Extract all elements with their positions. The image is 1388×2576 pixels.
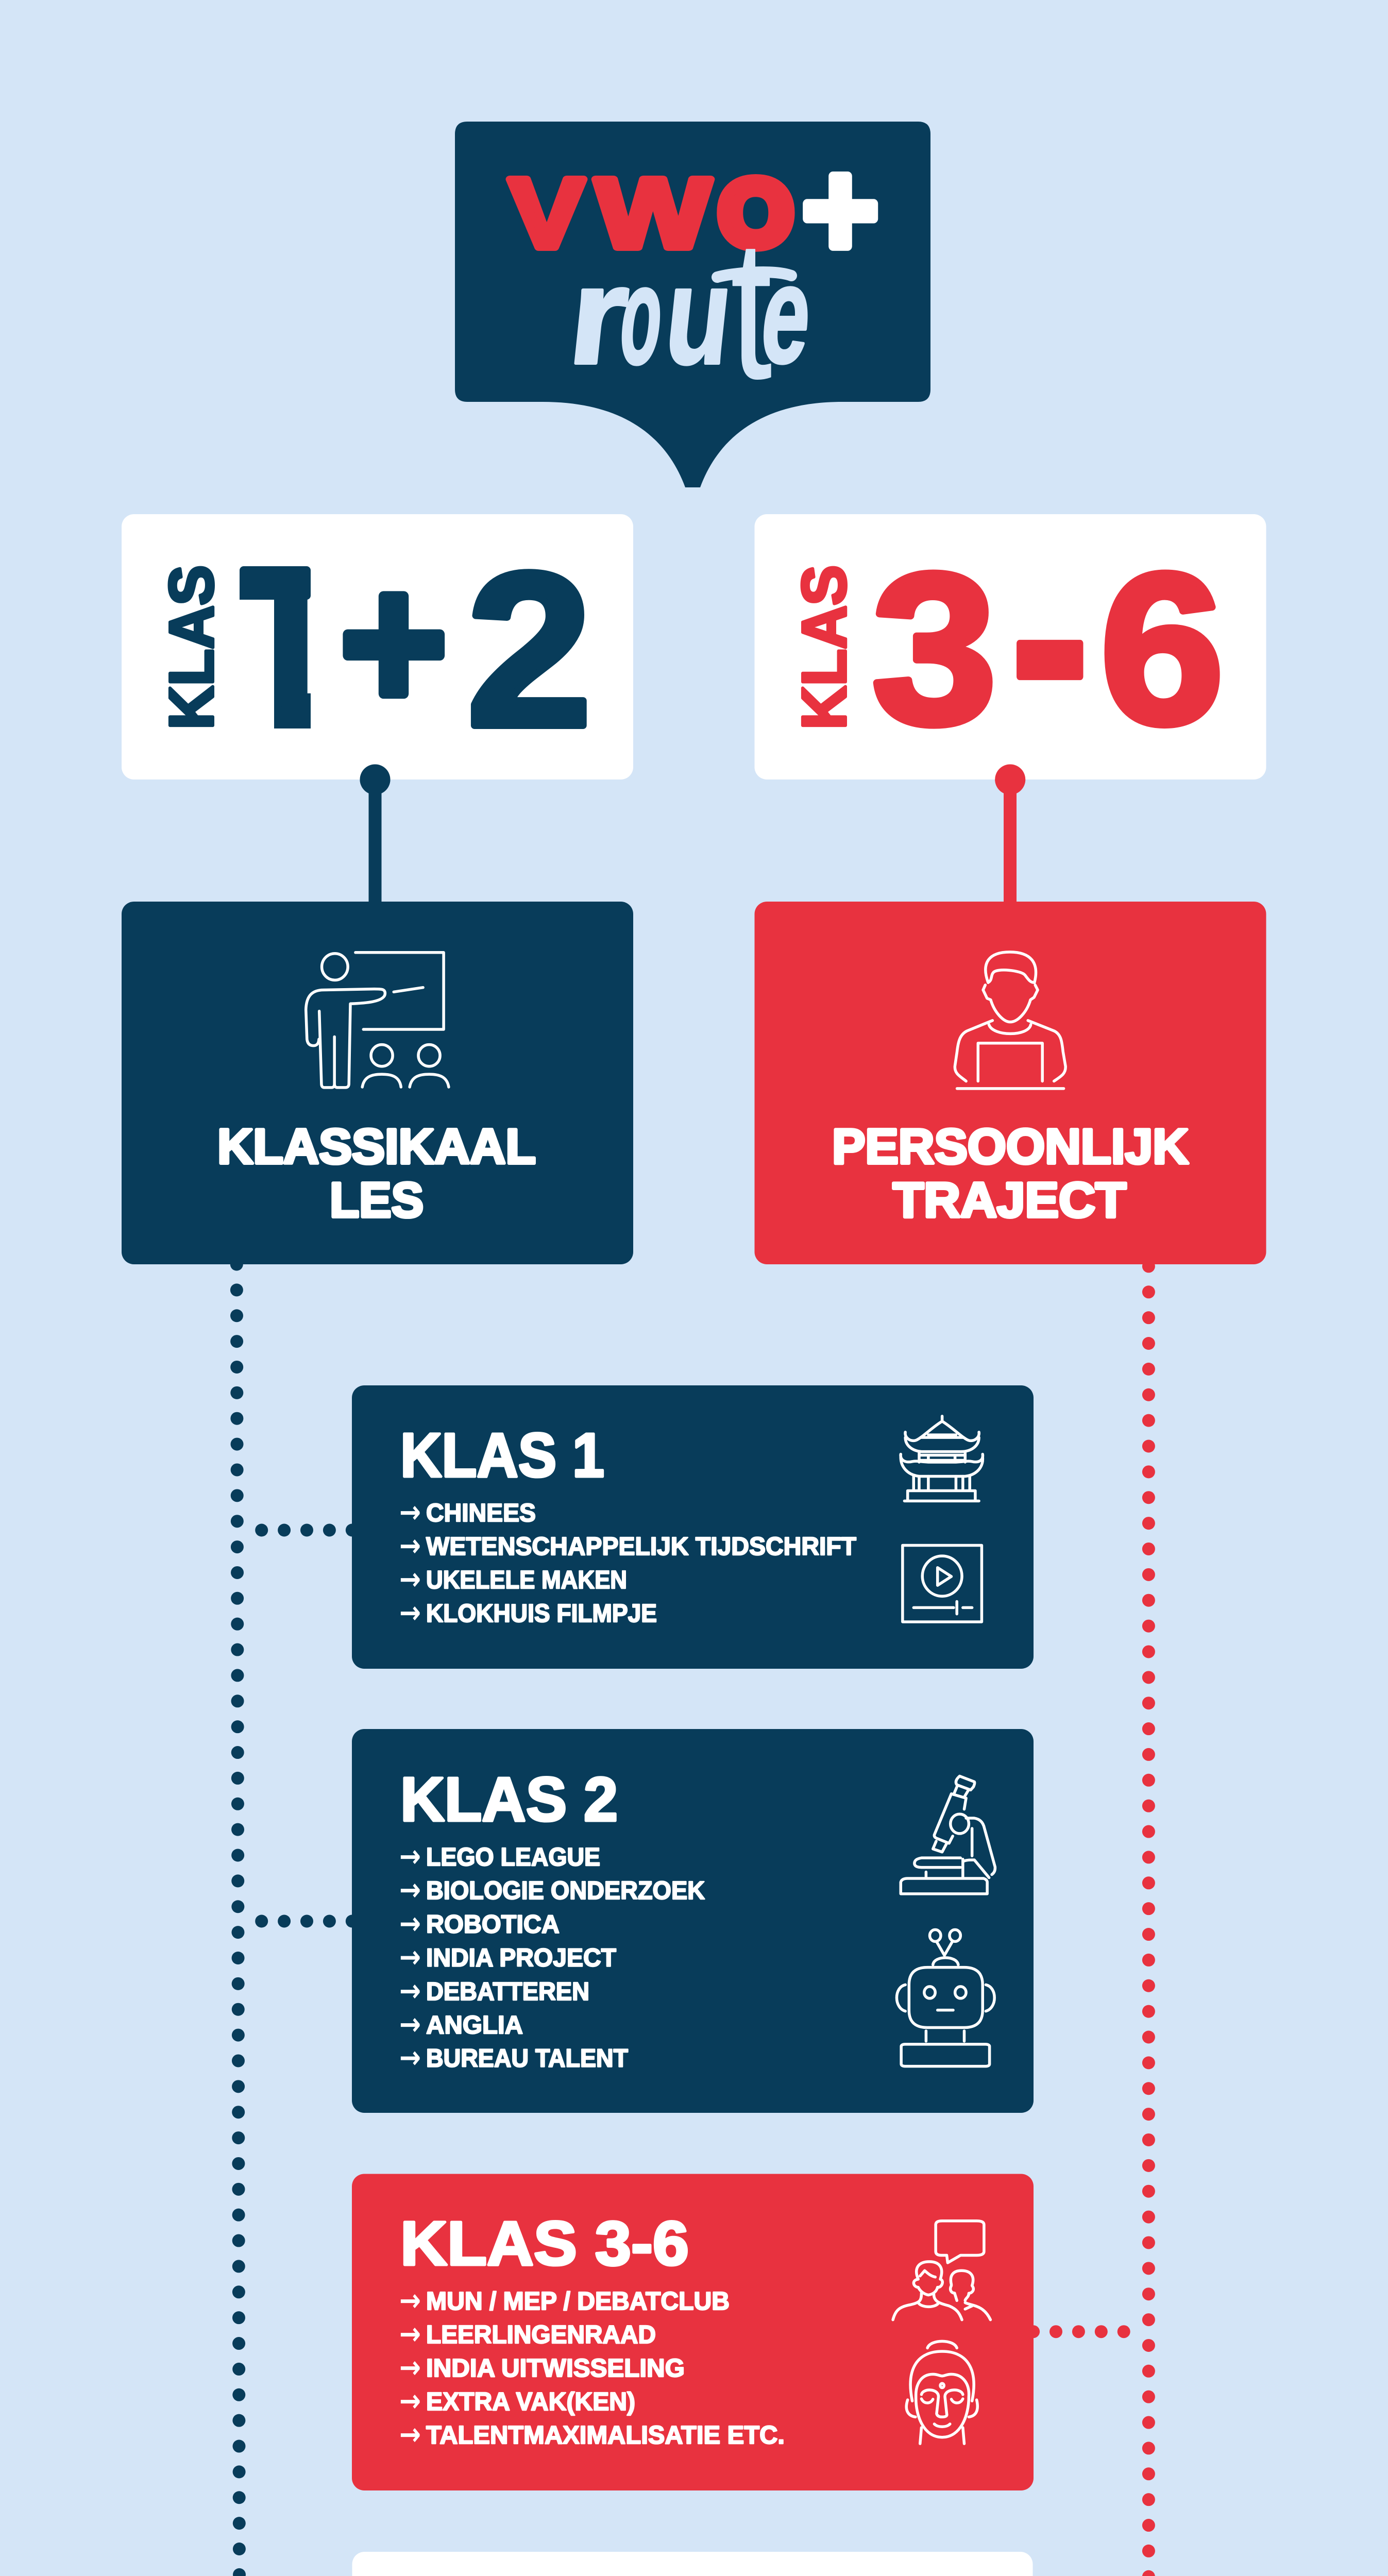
connector: klas 3-6: [995, 765, 1025, 903]
icon: video player: [903, 1545, 981, 1622]
list: klas 2 items: DEBATTEREN: [426, 1977, 589, 2006]
heading: persoonlijk traject: TRAJECT: [893, 1173, 1126, 1228]
list: klas 3-6 items: TALENTMAXIMALISATIE ETC.: [426, 2421, 785, 2449]
panel: masterclasses: [352, 2552, 1032, 2576]
logo: route: o: [614, 239, 670, 393]
list: klas 2 items: [399, 1838, 705, 2076]
list: klas 1 items: →: [399, 1528, 421, 1564]
label: klas: KLAS: [789, 565, 859, 730]
list: klas 2 items: BUREAU TALENT: [426, 2044, 628, 2073]
logo: route: [563, 198, 819, 420]
list: klas 1 items: [399, 1494, 856, 1631]
number: 3-6: 6: [1100, 529, 1224, 769]
heading: klas 3-6: KLAS 3-6: [400, 2209, 689, 2278]
list: klas 1 items: UKELELE MAKEN: [426, 1566, 627, 1594]
panel: persoonlijk traject: [754, 902, 1266, 1264]
logo: vwo: [509, 158, 792, 268]
list: klas 3-6 items: →: [399, 2282, 421, 2318]
heading: persoonlijk traject: PERSOONLIJK: [832, 1119, 1189, 1174]
list: klas 2 items: LEGO LEAGUE: [426, 1843, 600, 1871]
list: klas 2 items: →: [399, 1906, 421, 1942]
list: klas 2 items: →: [399, 1838, 421, 1874]
logo: route: t: [731, 198, 772, 420]
icon: robot: [896, 1929, 994, 2066]
dotted route: persoonlijk traject (red): [1034, 1266, 1148, 2576]
list: klas 2 items: →: [399, 1973, 421, 2009]
number: 1+2: [240, 566, 587, 729]
list: klas 2 items: →: [399, 1872, 421, 1908]
list: klas 2 items: ANGLIA: [426, 2011, 523, 2039]
logo: plus: +: [802, 132, 879, 286]
list: klas 1 items: →: [399, 1561, 421, 1597]
heading: persoonlijk traject: [832, 1119, 1189, 1228]
list: klas 3-6 items: INDIA UITWISSELING: [426, 2354, 685, 2382]
title badge: [455, 122, 930, 487]
list: klas 3-6 items: [399, 2282, 785, 2452]
number: 1+2: 2: [467, 528, 592, 772]
list: klas 3-6 items: LEERLINGENRAAD: [426, 2320, 656, 2349]
list: klas 2 items: →: [399, 2040, 421, 2076]
list: klas 1 items: →: [399, 1494, 421, 1530]
list: klas 2 items: INDIA PROJECT: [426, 1944, 616, 1972]
panel: klas 2: [352, 1729, 1034, 2113]
logo: vwo: W: [596, 158, 711, 268]
icon: pagoda: [901, 1416, 983, 1501]
list: klas 3-6 items: →: [399, 2316, 421, 2352]
icon: two people with speech bubble: [893, 2221, 990, 2320]
list: klas 2 items: ROBOTICA: [426, 1910, 560, 1938]
panel: klas 1: [352, 1385, 1034, 1669]
heading: klas 1: KLAS 1: [400, 1420, 604, 1490]
heading: klassikaal les: [217, 1119, 536, 1228]
list: klas 3-6 items: →: [399, 2383, 421, 2419]
list: klas 2 items: →: [399, 2006, 421, 2042]
speech bubble shape: [455, 122, 930, 487]
connector: klas 1+2: [360, 765, 391, 903]
panel: klassikaal les: [122, 902, 633, 1264]
list: klas 2 items: BIOLOGIE ONDERZOEK: [426, 1876, 705, 1905]
icon: microscope: [901, 1776, 995, 1894]
heading: klassikaal les: LES: [330, 1173, 424, 1228]
icon: teacher at board with students: [306, 953, 449, 1088]
panel: klas 3-6 activities: [352, 2174, 1034, 2490]
icon: buddha head: [906, 2341, 977, 2444]
logo: route: e: [755, 238, 819, 392]
heading: klassikaal les: KLASSIKAAL: [217, 1119, 536, 1174]
logo: vwo: O: [719, 161, 792, 264]
number: 3-6: 3: [872, 529, 997, 769]
list: klas 2 items: →: [399, 1939, 421, 1975]
list: klas 1 items: →: [399, 1595, 421, 1631]
list: klas 1 items: CHINEES: [426, 1499, 536, 1527]
label: klas: KLAS: [157, 565, 226, 730]
number: 3-6: [872, 481, 1224, 791]
panel: klas 3-6: [754, 481, 1266, 794]
icon: student at laptop: [955, 952, 1065, 1089]
number: 1+2: +: [340, 535, 447, 749]
logo: route: u: [659, 239, 739, 393]
list: klas 3-6 items: →: [399, 2416, 421, 2452]
panel: klas 1+2: [122, 514, 633, 794]
logo: route: r: [563, 239, 635, 393]
number: 3-6: -: [1010, 481, 1090, 791]
list: klas 3-6 items: →: [399, 2349, 421, 2385]
number: 1+2: 1: [233, 522, 334, 772]
list: klas 3-6 items: EXTRA VAK(KEN): [426, 2387, 635, 2416]
list: klas 3-6 items: MUN / MEP / DEBATCLUB: [426, 2287, 730, 2315]
list: klas 1 items: WETENSCHAPPELIJK TIJDSCHRIFT: [426, 1532, 856, 1561]
dotted route: klassikaal (navy): [236, 1264, 361, 2576]
heading: klas 2: KLAS 2: [400, 1765, 618, 1834]
list: klas 1 items: KLOKHUIS FILMPJE: [426, 1599, 657, 1628]
logo: vwo: V: [509, 158, 584, 268]
